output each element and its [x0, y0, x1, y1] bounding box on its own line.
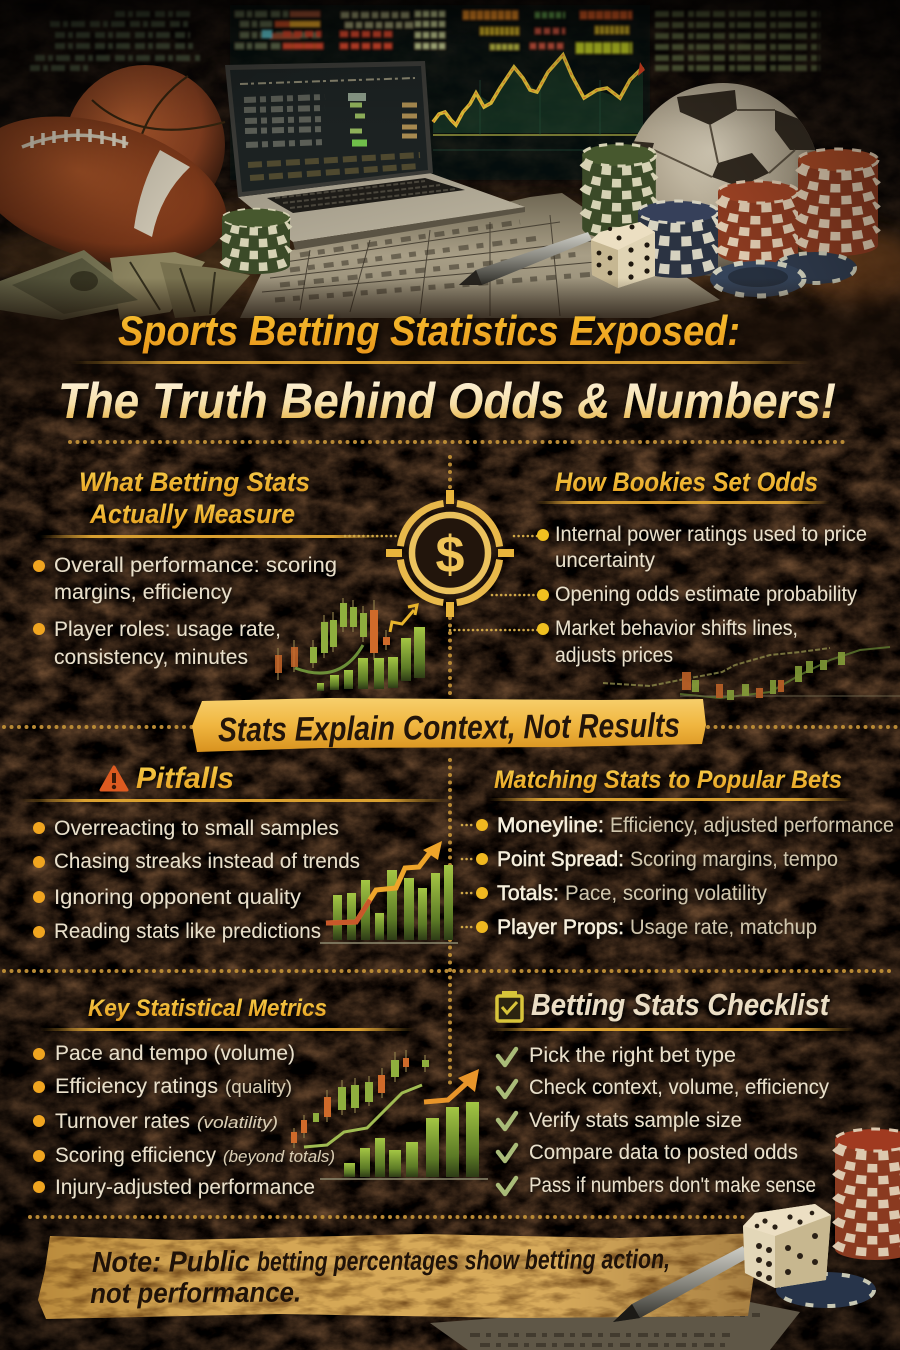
checklist: Pass if numbers don't make sense: [529, 1173, 816, 1197]
list: Pace and tempo (volume): [55, 1041, 295, 1065]
list: Point Spread:: [497, 847, 624, 871]
stats ticker board: [30, 5, 820, 180]
list: Scoring margins, tempo: [630, 847, 838, 871]
icon: scribbled stats paper: [240, 193, 720, 318]
checklist: Compare data to posted odds: [529, 1140, 798, 1164]
list: Chasing streaks instead of trends: [54, 849, 360, 873]
list: Efficiency ratings: [55, 1074, 218, 1098]
banner: stats explain context: Stats Explain Context, Not Results: [218, 707, 680, 749]
hero illustration: [0, 0, 900, 440]
panel: what betting stats measure: [33, 467, 425, 691]
checklist: Pick the right bet type: [529, 1043, 736, 1067]
list: Totals:: [497, 881, 559, 905]
list: margins, efficiency: [54, 580, 232, 604]
panel: matching stats to popular bets: [462, 766, 894, 939]
list: Player roles: usage rate,: [54, 617, 281, 641]
panel: key statistical metrics: [33, 995, 488, 1199]
icon: soccer ball: [633, 83, 816, 276]
list: Moneyline:: [497, 813, 604, 837]
list: Internal power ratings used to price: [555, 522, 867, 546]
list: Reading stats like predictions: [54, 919, 321, 943]
heading: Matching Stats to Popular Bets: [494, 766, 842, 794]
icon: die: [591, 222, 655, 288]
icon: red chip stack tall: [798, 149, 878, 256]
list: [33, 553, 337, 669]
icon: pen: [459, 232, 592, 285]
list: (beyond totals): [223, 1147, 335, 1166]
heading: Actually Measure: [89, 499, 295, 529]
callout: note: Note: Public: [92, 1246, 250, 1279]
icon: dollar bills: [0, 250, 250, 320]
list: Usage rate, matchup: [630, 915, 817, 939]
icon: blue chip stack: [638, 201, 718, 278]
icon: basketball: [65, 65, 225, 225]
icon: green chip stack (laptop side): [222, 209, 290, 274]
line chart on board: [433, 55, 645, 150]
callout: note: not performance.: [90, 1277, 301, 1309]
heading: Key Statistical Metrics: [88, 995, 327, 1022]
icon: blue chip (footer): [776, 1272, 876, 1308]
faint trend chart: [603, 647, 900, 700]
title: The Truth Behind Odds & Numbers!: [58, 373, 836, 429]
heading: What Betting Stats: [79, 467, 310, 497]
title: [58, 307, 836, 429]
list: Injury-adjusted performance: [55, 1175, 315, 1199]
list: uncertainty: [555, 548, 655, 572]
title: Sports Betting Statistics Exposed:: [118, 307, 740, 354]
list: Ignoring opponent quality: [54, 885, 301, 909]
panel: betting stats checklist: [490, 987, 855, 1197]
list: (quality): [225, 1077, 292, 1097]
callout: note: betting percentages show betting action,: [257, 1244, 670, 1277]
bar chart with rising arrow: [320, 841, 458, 943]
list: Overreacting to small samples: [54, 816, 339, 840]
heading: [79, 467, 310, 529]
icon: football: [0, 90, 244, 292]
callout: note: [38, 1233, 760, 1319]
icon: red chips stack (footer): [835, 1129, 900, 1260]
list: consistency, minutes: [54, 645, 248, 669]
icon: clipboard: [497, 991, 522, 1021]
heading: Betting Stats Checklist: [531, 987, 830, 1022]
heading: Pitfalls: [136, 762, 234, 795]
icon: laptop: [225, 61, 525, 250]
candlestick chart: [275, 598, 425, 691]
list: Scoring efficiency: [55, 1143, 216, 1167]
list: Turnover rates: [55, 1109, 190, 1133]
banner: stats explain context: [192, 698, 706, 752]
list: [33, 816, 360, 943]
icon: target with dollar sign: [345, 490, 540, 630]
heading: How Bookies Set Odds: [555, 467, 818, 497]
icon: red chip stack short: [718, 181, 798, 264]
list: (volatility): [197, 1113, 278, 1132]
list: Player Props:: [497, 915, 624, 939]
checklist: Check context, volume, efficiency: [529, 1075, 829, 1099]
panel: how bookies set odds: [535, 467, 900, 700]
list: Market behavior shifts lines,: [555, 616, 798, 640]
icon: warning: [101, 767, 127, 790]
list: [462, 813, 894, 939]
combined candlestick and bar chart: [291, 1050, 488, 1179]
icon: pen (footer): [613, 1246, 748, 1322]
icon: scribbled paper (footer): [430, 1300, 800, 1350]
list: Overall performance: scoring: [54, 553, 337, 577]
icon: die (footer): [743, 1204, 831, 1288]
panel: pitfalls: [20, 762, 458, 943]
list: [537, 522, 867, 667]
list: adjusts prices: [555, 643, 673, 667]
checklist: Verify stats sample size: [529, 1108, 742, 1132]
icon: green chip stack: [582, 144, 656, 239]
list: Pace, scoring volatility: [565, 881, 767, 905]
icon: target with dollar sign: $: [436, 526, 465, 584]
icon: flat blue chips: [710, 252, 857, 297]
list: Opening odds estimate probability: [555, 582, 857, 606]
checklist: [498, 1043, 829, 1197]
list: [33, 1041, 335, 1199]
